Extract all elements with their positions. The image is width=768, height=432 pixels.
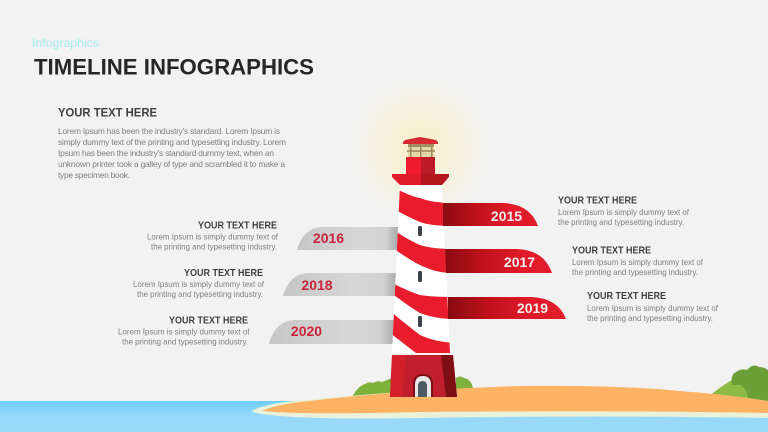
bushes behind lighthouse xyxy=(352,376,473,397)
text block 2016: YOUR TEXT HERE xyxy=(198,220,277,232)
intro text block: unknown printer took a galley of type and scrambled it to make a xyxy=(58,159,285,169)
left band 2018 xyxy=(283,273,397,296)
right band 2019 xyxy=(448,297,566,319)
text block 2019: YOUR TEXT HERE xyxy=(587,291,666,302)
bushes right xyxy=(709,366,768,402)
text block 2017: the printing and typesetting industry. xyxy=(572,267,698,277)
text block 2018: Lorem Ipsum is simply dummy text of xyxy=(133,279,265,289)
title: TIMELINE INFOGRAPHICS xyxy=(34,54,314,80)
tower base xyxy=(390,355,457,397)
intro text block: Ipsum has been the industry's standard dummy text, when an xyxy=(58,148,274,158)
text block 2020: Lorem Ipsum is simply dummy text of xyxy=(118,326,250,336)
lantern housing xyxy=(406,157,435,174)
gallery deck xyxy=(392,174,449,185)
lantern glass xyxy=(407,144,435,157)
text block 2020 xyxy=(118,316,250,346)
text block 2018 xyxy=(133,268,265,299)
eyebrow label: Infographics xyxy=(32,36,99,50)
text block 2015: the printing and typesetting industry. xyxy=(558,217,684,227)
text block 2017 xyxy=(572,246,704,277)
right band 2015 xyxy=(443,203,538,226)
text block 2015 xyxy=(558,196,690,227)
left band 2020 xyxy=(269,320,395,344)
intro text block: Lorem Ipsum has been the industry's standard. Lorem Ipsum is xyxy=(58,126,280,136)
light glow xyxy=(348,76,492,220)
intro text block: YOUR TEXT HERE xyxy=(58,106,157,120)
lantern roof xyxy=(403,137,438,144)
left band 2016: 2016 xyxy=(313,230,344,246)
intro text block: simply dummy text of the printing and typesetting industry. Lorem xyxy=(58,137,286,147)
door xyxy=(413,374,433,397)
text block 2019: Lorem Ipsum is simply dummy text of xyxy=(587,303,719,313)
text block 2017: YOUR TEXT HERE xyxy=(572,246,651,256)
right band 2019: 2019 xyxy=(517,300,548,316)
right band 2017 xyxy=(445,249,552,273)
text block 2016: the printing and typesetting industry. xyxy=(151,242,277,252)
tower windows xyxy=(418,226,422,327)
right band 2017: 2017 xyxy=(504,254,535,270)
text block 2015: Lorem Ipsum is simply dummy text of xyxy=(558,207,690,217)
right band 2015: 2015 xyxy=(491,208,522,224)
lighthouse xyxy=(390,137,457,397)
text block 2020: YOUR TEXT HERE xyxy=(169,316,248,326)
red stripes xyxy=(392,190,450,353)
text block 2020: the printing and typesetting industry. xyxy=(122,336,248,346)
left band 2020: 2020 xyxy=(291,323,322,339)
text block 2018: the printing and typesetting industry. xyxy=(137,289,263,299)
text block 2019: the printing and typesetting industry. xyxy=(587,313,713,323)
text block 2019 xyxy=(587,291,719,323)
sea xyxy=(0,401,768,432)
text block 2015: YOUR TEXT HERE xyxy=(558,196,637,206)
left band 2016 xyxy=(297,227,398,250)
intro text block xyxy=(58,106,286,180)
text block 2016 xyxy=(147,220,279,252)
intro text block: type specimen book. xyxy=(58,170,130,180)
text block 2018: YOUR TEXT HERE xyxy=(184,268,263,279)
text block 2016: Lorem Ipsum is simply dummy text of xyxy=(147,232,279,242)
text block 2017: Lorem Ipsum is simply dummy text of xyxy=(572,257,704,267)
island xyxy=(252,386,768,418)
left band 2018: 2018 xyxy=(301,277,333,293)
tower body xyxy=(392,185,450,353)
